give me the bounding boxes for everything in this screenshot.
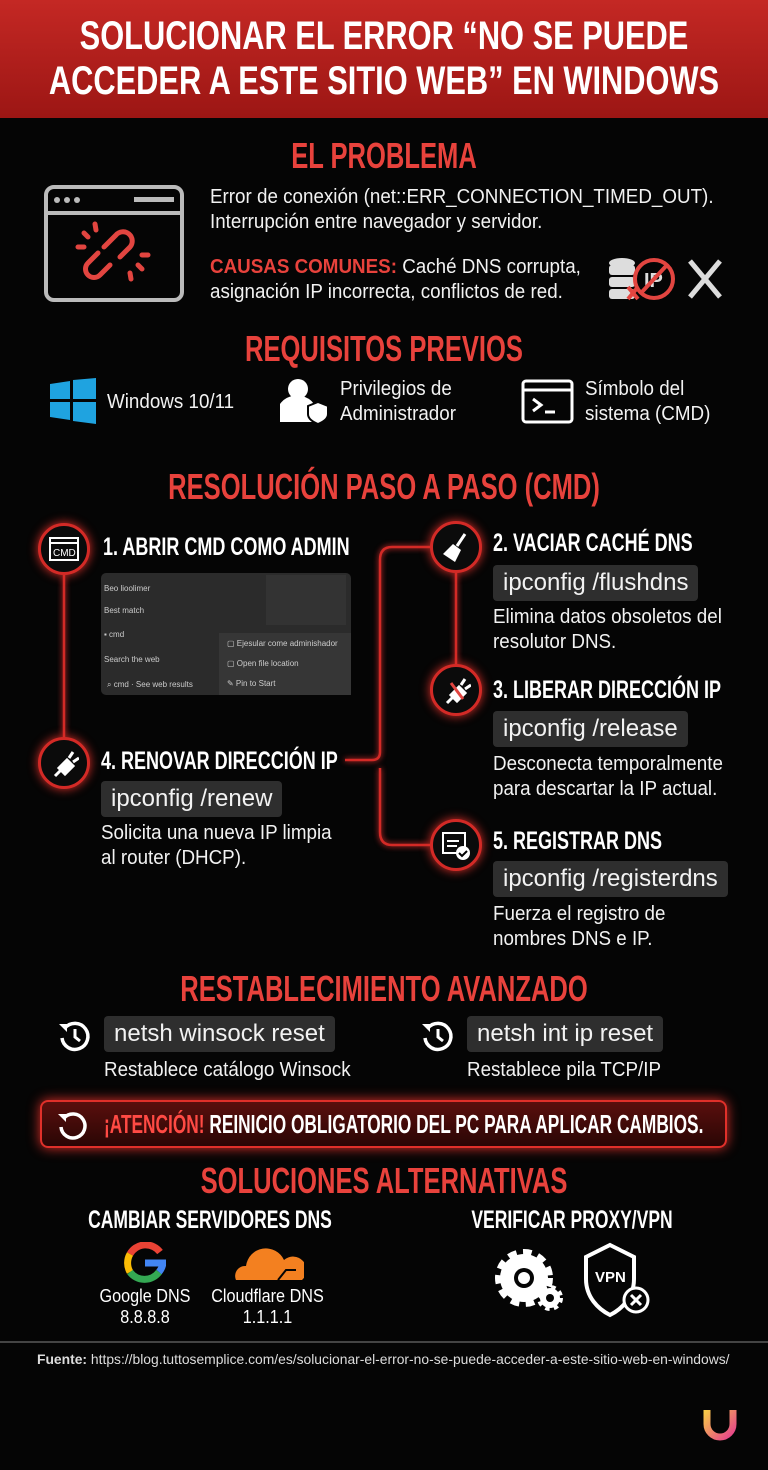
- title: ACCEDER A ESTE SITIO WEB” EN WINDOWS: [49, 59, 719, 103]
- text: causes: [210, 256, 581, 303]
- step 4: [30, 730, 338, 869]
- heading: requisitos previos: REQUISITOS PREVIOS: [245, 328, 523, 369]
- step 1: [30, 515, 351, 695]
- icon: reset: [59, 1022, 90, 1052]
- icon: cmd circle: [38, 523, 90, 575]
- text: google dns: 8.8.8.8: [120, 1307, 170, 1327]
- code: release: ipconfig /release: [503, 715, 678, 742]
- text: cloudflare dns: 1.1.1.1: [243, 1307, 292, 1327]
- text: admin: Administrador: [340, 403, 456, 425]
- desc step 4: Solicita una nueva IP limpia: [101, 822, 332, 844]
- text: causes: CAUSAS COMUNES: Caché DNS corrupta,: [210, 256, 581, 278]
- icon: google: [124, 1242, 166, 1283]
- code: registerdns: ipconfig /registerdns: [503, 865, 718, 892]
- screenshot: start menu: ▢ Open file location: [227, 659, 299, 668]
- text: causes: asignación IP incorrecta, conflictos de red.: [210, 281, 563, 303]
- desc winsock: Restablece catálogo Winsock: [104, 1059, 351, 1081]
- desc step 2: resolutor DNS.: [493, 631, 616, 653]
- text: cloudflare dns: Cloudflare DNS: [211, 1286, 324, 1306]
- heading: el problema: EL PROBLEMA: [291, 135, 477, 176]
- icon: plug: [430, 664, 482, 716]
- title step 1: 1. ABRIR CMD COMO ADMIN: [103, 533, 350, 561]
- code: winsock: netsh winsock reset: [114, 1020, 325, 1047]
- title step 2: 2. VACIAR CACHÉ DNS: [493, 529, 693, 557]
- icons: causes: IP: [644, 270, 663, 292]
- code: int ip reset: netsh int ip reset: [477, 1020, 653, 1047]
- desc ip reset: Restablece pila TCP/IP: [467, 1059, 661, 1081]
- desc step 4: [101, 822, 332, 869]
- screenshot: start menu: ⌕ cmd · See web results: [107, 680, 193, 689]
- divider: [0, 1341, 768, 1343]
- icon: cmd circle: CMD: [53, 548, 76, 559]
- code: registerdns: [493, 861, 728, 897]
- desc step 2: [493, 606, 722, 653]
- text: cloudflare dns: [211, 1286, 324, 1327]
- code: flushdns: [493, 565, 698, 601]
- code: renew: [101, 781, 282, 817]
- code: flushdns: ipconfig /flushdns: [503, 569, 688, 596]
- header band: [0, 0, 768, 118]
- icons: causes: [609, 258, 722, 300]
- code: winsock: [104, 1016, 335, 1052]
- screenshot: start menu: ▪ cmd: [104, 630, 124, 639]
- icon: admin user: [280, 379, 327, 423]
- desc step 4: al router (DHCP).: [101, 847, 246, 869]
- icon: broken link browser: [44, 185, 184, 302]
- icon: broom: [430, 521, 482, 573]
- screenshot: start menu: ✎ Pin to Start: [227, 679, 276, 688]
- icon: vpn shield: [584, 1242, 650, 1318]
- subheading: dns: CAMBIAR SERVIDORES DNS: [88, 1206, 332, 1234]
- text: cmd: [585, 378, 710, 425]
- text: problem description: [210, 186, 714, 233]
- logo: [704, 1410, 736, 1440]
- icon: gears: [495, 1249, 563, 1311]
- title: SOLUCIONAR EL ERROR “NO SE PUEDE: [80, 14, 688, 58]
- text: google dns: [100, 1286, 190, 1327]
- advanced: winsock: [59, 1016, 351, 1081]
- screenshot: start menu: ▢ Ejesular come adminishador: [227, 639, 338, 648]
- text: admin: Privilegios de: [340, 378, 452, 400]
- title step 4: 4. RENOVAR DIRECCIÓN IP: [101, 747, 338, 775]
- text: problem description: Interrupción entre navegador y servidor.: [210, 211, 542, 233]
- heading: restablecimiento avanzado: RESTABLECIMIENTO AVANZADO: [180, 968, 588, 1009]
- text: problem description: Error de conexión (net::ERR_CONNECTION_TIMED_OUT).: [210, 186, 714, 208]
- title step 3: 3. LIBERAR DIRECCIÓN IP: [493, 676, 721, 704]
- callout text: ¡ATENCIÓN! REINICIO OBLIGATORIO DEL PC PARA APLICAR CAMBIOS.: [104, 1109, 703, 1139]
- title: [49, 14, 719, 103]
- desc step 2: Elimina datos obsoletos del: [493, 606, 722, 628]
- icon: restart: [58, 1112, 87, 1140]
- desc step 3: para descartar la IP actual.: [493, 778, 717, 800]
- step 2: [422, 513, 722, 653]
- screenshot: start menu: [101, 573, 351, 695]
- text: admin: [340, 378, 456, 425]
- icon: reset: [422, 1022, 453, 1052]
- connector lines: [58, 541, 462, 851]
- text: google dns: Google DNS: [100, 1286, 190, 1306]
- step 3: [422, 656, 723, 800]
- screenshot: start menu: Best match: [104, 606, 144, 615]
- icon: plug: [38, 737, 90, 789]
- heading: resolucion paso a paso: RESOLUCIÓN PASO A PASO (CMD): [168, 466, 600, 507]
- icon: cloudflare: [235, 1248, 304, 1280]
- advanced: ip reset: [422, 1016, 663, 1081]
- icon: cmd: [522, 380, 574, 424]
- code: renew: ipconfig /renew: [111, 785, 272, 812]
- screenshot: start menu: Beo lioolimer: [104, 584, 150, 593]
- heading: soluciones alternativas: SOLUCIONES ALTERNATIVAS: [201, 1160, 567, 1201]
- text: windows: Windows 10/11: [107, 391, 234, 413]
- icon: windows: [50, 378, 96, 424]
- source: Fuente: https://blog.tuttosemplice.com/es/solucionar-el-error-no-se-puede-acceder-a-este-sitio-web-en-windows/: [37, 1351, 730, 1367]
- desc step 5: [493, 903, 665, 950]
- icon: register: [430, 819, 482, 871]
- subheading: proxy: VERIFICAR PROXY/VPN: [471, 1206, 673, 1234]
- text: cmd: Símbolo del: [585, 378, 684, 400]
- text: cmd: sistema (CMD): [585, 403, 710, 425]
- desc step 3: [493, 753, 723, 800]
- callout: attention: [40, 1100, 727, 1148]
- desc step 5: nombres DNS e IP.: [493, 928, 653, 950]
- screenshot: start menu: Search the web: [104, 655, 160, 664]
- icon: vpn shield: VPN: [595, 1269, 626, 1286]
- desc step 5: Fuerza el registro de: [493, 903, 665, 925]
- desc step 3: Desconecta temporalmente: [493, 753, 723, 775]
- code: release: [493, 711, 688, 747]
- title step 5: 5. REGISTRAR DNS: [493, 827, 662, 855]
- code: int ip reset: [467, 1016, 663, 1052]
- step 5: [422, 811, 728, 950]
